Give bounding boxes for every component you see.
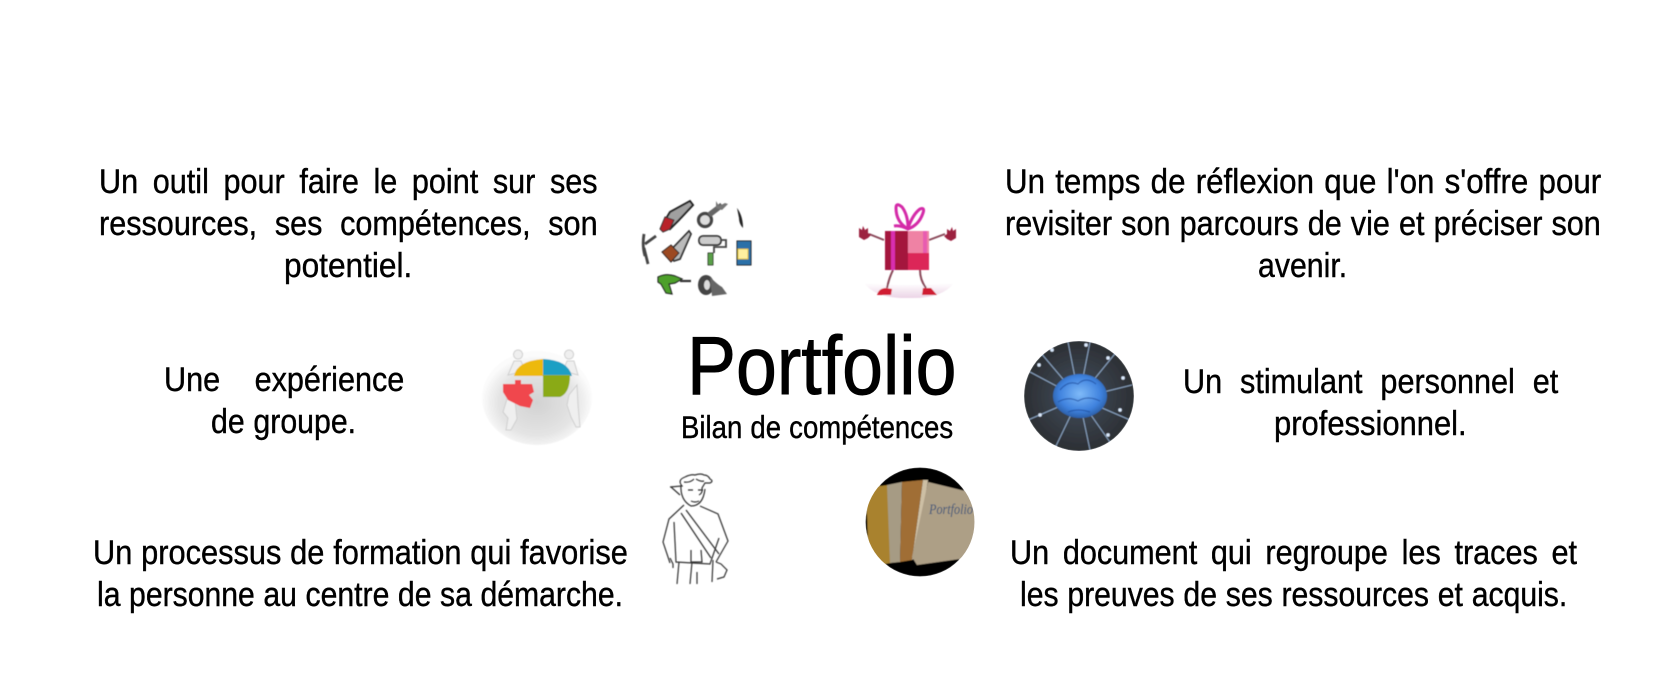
icon: stack of portfolio books xyxy=(866,468,976,576)
text: Un stimulant personnel et xyxy=(1183,363,1558,401)
left cover xyxy=(866,485,891,566)
arms and legs xyxy=(869,234,945,288)
ribbon xyxy=(894,205,924,229)
text: Bilan de compétences xyxy=(681,409,953,445)
spine xyxy=(887,482,902,563)
green piece xyxy=(543,375,570,397)
yellow piece xyxy=(514,359,543,376)
brain folds xyxy=(1058,380,1100,412)
text: Un temps de réflexion que l'on s'offre pour xyxy=(1005,163,1601,201)
wrench xyxy=(698,201,728,226)
icon: tools xyxy=(643,201,751,296)
jacket xyxy=(663,505,728,568)
hands and feet xyxy=(859,226,956,241)
text block: formation xyxy=(93,534,628,614)
icon: glowing brain xyxy=(1024,341,1134,451)
white figures xyxy=(503,350,580,430)
text: ressources, ses compétences, son xyxy=(99,205,598,243)
sparks xyxy=(1039,345,1123,435)
text: avenir. xyxy=(1258,247,1347,285)
chainsaw xyxy=(660,201,693,232)
text: potentiel. xyxy=(284,247,412,285)
text block: stimulant xyxy=(1183,363,1558,443)
paint can xyxy=(737,241,751,265)
text: revisiter son parcours de vie et préciser son xyxy=(1005,205,1601,243)
text: de groupe. xyxy=(211,403,356,441)
front cover xyxy=(912,482,976,565)
text: Un outil pour faire le point sur ses xyxy=(99,163,598,201)
box xyxy=(885,231,929,270)
text: Une expérience xyxy=(164,361,404,399)
text: les preuves de ses ressources et acquis. xyxy=(1020,576,1567,614)
trousers xyxy=(677,550,727,584)
icon: sketched person xyxy=(663,474,728,584)
text: Portfolio xyxy=(687,319,956,412)
icon: gift character xyxy=(859,205,956,298)
text block: document xyxy=(1010,534,1577,614)
face xyxy=(671,485,705,506)
neural rays xyxy=(1028,342,1132,450)
dark disc xyxy=(1024,341,1134,451)
pliers xyxy=(643,234,656,264)
brain xyxy=(1053,374,1107,418)
grey floor xyxy=(482,351,592,445)
text: professionnel. xyxy=(1274,405,1467,443)
teal piece xyxy=(543,359,572,376)
paint roller xyxy=(699,236,726,265)
black disc xyxy=(866,468,974,576)
cover edge xyxy=(912,480,928,560)
text: Un document qui regroupe les traces et xyxy=(1010,534,1577,572)
red piece xyxy=(503,380,534,408)
handwritten title: Portfolio xyxy=(928,502,973,518)
handsaw xyxy=(662,231,691,262)
orange cover xyxy=(900,480,923,562)
partial blade xyxy=(737,208,743,228)
text: la personne au centre de sa démarche. xyxy=(97,576,623,614)
drill xyxy=(658,275,691,294)
text block: outil xyxy=(99,163,598,285)
hair xyxy=(670,474,712,495)
tape roll xyxy=(698,275,727,296)
icon: puzzle team xyxy=(482,350,592,445)
text: Un processus de formation qui favorise xyxy=(93,534,628,572)
ground shadow xyxy=(864,283,954,298)
text block: temps de réflexion xyxy=(1005,163,1601,285)
text block: expérience de groupe xyxy=(164,361,404,441)
